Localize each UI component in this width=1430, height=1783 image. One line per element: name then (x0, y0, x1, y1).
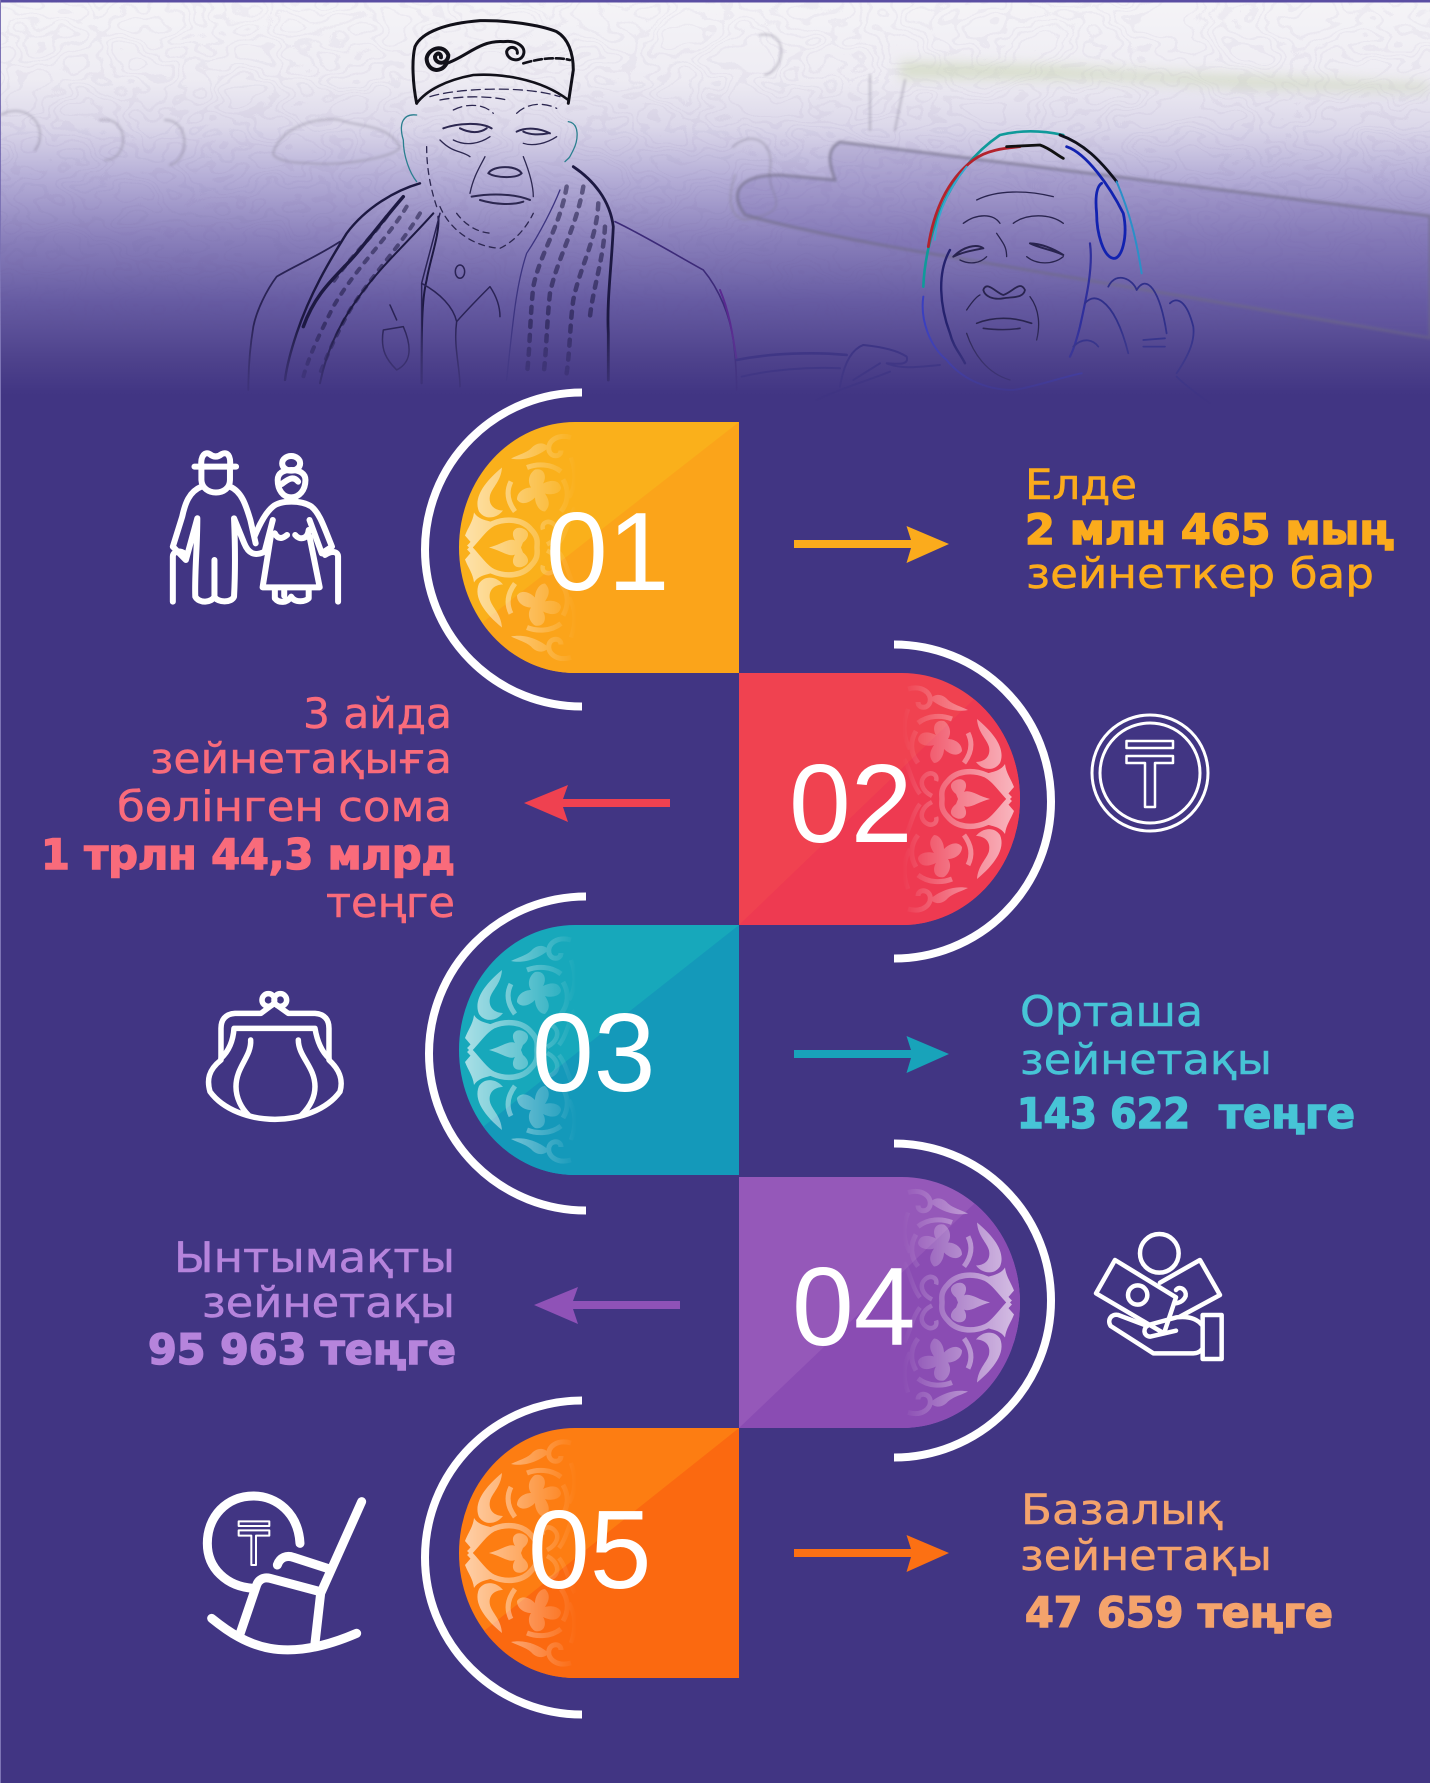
text 3 (1017, 987, 1355, 1138)
text 5: 47 659 теңге (1025, 1588, 1333, 1637)
number 05: 05 (528, 1488, 651, 1612)
background: swirls and posts (0, 35, 905, 220)
icon: rocking chair with tenge (207, 1496, 362, 1650)
man coat and collar (248, 213, 737, 390)
number 04: 04 (792, 1245, 915, 1369)
text 4: Ынтымақты (174, 1233, 455, 1282)
text 2 (41, 689, 455, 927)
bag handle and woman's fist (719, 289, 941, 375)
text 1: Елде (1025, 460, 1137, 509)
text 1: 2 млн 465 мың (1025, 505, 1394, 554)
shape 4 (739, 1177, 1020, 1428)
shape 1 (455, 420, 745, 676)
ornament 2 (904, 688, 1014, 910)
row 1 (173, 392, 1394, 706)
icon: tenge coin (1092, 715, 1208, 831)
text 4: 95 963 теңге (148, 1325, 456, 1374)
background: foliage strip (900, 62, 1430, 92)
text 5: зейнетақы (1020, 1531, 1272, 1580)
row 3 (209, 896, 1355, 1210)
icon: hand with money (1096, 1234, 1222, 1359)
number 01: 01 (546, 490, 669, 614)
shape 3 (455, 922, 745, 1178)
shape 5 (455, 1425, 745, 1681)
row 2 (41, 644, 1208, 958)
text 2: теңге (326, 878, 455, 927)
arc 4 (894, 1144, 1051, 1458)
arrow 1 (794, 526, 949, 563)
ornament 5 (465, 1442, 575, 1664)
man face (401, 89, 577, 248)
text 1 (1025, 460, 1394, 598)
text 4: зейнетақы (202, 1278, 455, 1327)
background: log (737, 142, 1430, 338)
ornament 4 (904, 1191, 1014, 1414)
man hat (413, 21, 573, 103)
number 02: 02 (789, 742, 912, 866)
text 5 (1020, 1485, 1333, 1637)
arrow 2 (524, 785, 670, 822)
text 1: зейнеткер бар (1026, 549, 1374, 598)
number 03: 03 (532, 991, 655, 1115)
woman sketch (720, 131, 1210, 403)
arc 1 (425, 392, 582, 706)
shape 2 (739, 673, 1020, 925)
row 5 (207, 1400, 1333, 1714)
text 4 (148, 1233, 456, 1374)
ornament 1 (465, 436, 575, 659)
woman face (953, 192, 1063, 380)
text 3: теңге (1219, 1089, 1355, 1138)
icon: elderly couple (173, 453, 338, 602)
text 5: Базалық (1021, 1485, 1223, 1534)
text 2: 3 айда (303, 689, 452, 738)
text 3: 143 622 (1017, 1089, 1190, 1138)
arrow 3 (794, 1036, 949, 1073)
man sketch (248, 21, 737, 390)
ornament 3 (465, 939, 575, 1161)
arc 5 (425, 1400, 582, 1714)
woman hand (1072, 276, 1194, 378)
arrow 5 (794, 1535, 949, 1572)
woman scarf (923, 131, 1142, 390)
text 2: зейнетақыға (150, 734, 452, 783)
text 3: зейнетақы (1020, 1035, 1272, 1084)
arc 2 (894, 644, 1051, 958)
arc 3 (429, 896, 586, 1210)
text 2: 1 трлн 44,3 млрд (41, 830, 455, 879)
text 3: Орташа (1020, 987, 1203, 1036)
row 4 (148, 1144, 1222, 1458)
text 2: бөлінген сома (117, 782, 452, 831)
arrow 4 (534, 1287, 680, 1324)
icon: purse (209, 994, 341, 1119)
man shawl (285, 167, 613, 383)
